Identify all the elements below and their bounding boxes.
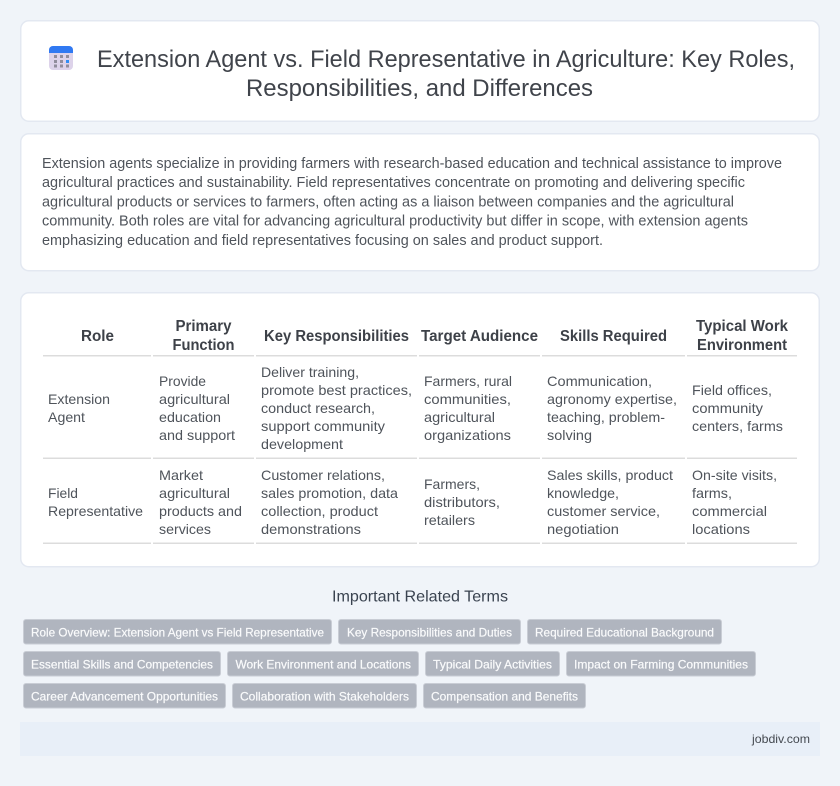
panel: title header: [21, 21, 819, 121]
table row: Extension Agent: conduct research,: [261, 400, 375, 416]
table row: Field Representative: On-site visits,: [692, 467, 777, 483]
table row: Extension Agent: and support: [159, 427, 235, 443]
table row: Extension Agent: solving: [547, 427, 592, 443]
panel: summary text: [21, 134, 819, 271]
table row: Field Representative: Customer relations,: [261, 467, 385, 483]
table row: Extension Agent: [48, 364, 783, 452]
table row: Extension Agent: agricultural: [159, 391, 230, 407]
panel: related term chips: Collaboration with Stakeholders: [240, 689, 409, 703]
table row: Field Representative: farms,: [692, 485, 732, 501]
footer: [20, 722, 820, 756]
table row: Extension Agent: agricultural: [424, 409, 495, 425]
panel: comparison table: [21, 293, 819, 567]
table row: Field Representative: sales promotion, data: [261, 485, 398, 501]
panel: related term chips: [24, 620, 756, 708]
table row: Extension Agent: Provide: [159, 373, 206, 389]
panel: related term chips: Compensation and Benefits: [431, 689, 578, 703]
panel: summary text: community. Both roles are vital for advancing agricultural productivity but differ in scope, with extension agents: [42, 214, 748, 230]
table row: Field Representative: knowledge,: [547, 485, 619, 501]
table header row: Key Responsibilities: [264, 328, 409, 345]
table header row: Primary: [176, 318, 232, 335]
table row: Extension Agent: Farmers, rural: [424, 373, 512, 389]
table row: Extension Agent: Deliver training,: [261, 364, 359, 380]
table row: Extension Agent: education: [159, 409, 221, 425]
table header row: Function: [172, 337, 234, 354]
heading: important related terms: Important Related Terms: [332, 588, 508, 606]
panel: related term chips: Key Responsibilities and Duties: [347, 625, 512, 639]
table row: Field Representative: negotiation: [547, 521, 619, 537]
icon: calendar: [49, 46, 73, 70]
table header row: Typical Work: [696, 318, 788, 335]
table row: Field Representative: collection, product: [261, 503, 378, 519]
table row: Field Representative: services: [159, 521, 211, 537]
table header row: Skills Required: [560, 328, 667, 345]
table row: Extension Agent: community: [692, 400, 763, 416]
table row: Field Representative: Farmers,: [424, 476, 480, 492]
table header row: Role: [81, 328, 114, 345]
table row: Extension Agent: teaching, problem-: [547, 409, 665, 425]
panel: summary text: emphasizing education and field representatives focusing on sales and product support.: [42, 233, 603, 249]
table row: Field Representative: Field: [48, 485, 78, 501]
table row: Extension Agent: agronomy expertise,: [547, 391, 677, 407]
table row: Extension Agent: development: [261, 436, 343, 452]
panel: related term chips: Role Overview: Extension Agent vs Field Representative: [31, 625, 324, 639]
table row: Field Representative: agricultural: [159, 485, 230, 501]
table row: Extension Agent: Field offices,: [692, 382, 772, 398]
footer: jobdiv.com: [751, 732, 810, 746]
table row: Field Representative: Market: [159, 467, 203, 483]
panel: related term chips: Required Educational Background: [535, 625, 714, 639]
title: [97, 47, 795, 102]
table row: Field Representative: products and: [159, 503, 242, 519]
table row: Extension Agent: Extension: [48, 391, 110, 407]
table row: Extension Agent: communities,: [424, 391, 511, 407]
table row: Extension Agent: organizations: [424, 427, 511, 443]
panel: related term chips: Typical Daily Activities: [433, 657, 552, 671]
table row: Extension Agent: promote best practices,: [261, 382, 412, 398]
table header row: Target Audience: [421, 328, 538, 345]
table row: Extension Agent: Agent: [48, 409, 85, 425]
panel: related term chips: Essential Skills and Competencies: [31, 657, 213, 671]
panel: related term chips: Impact on Farming Communities: [574, 657, 748, 671]
table row: Field Representative: locations: [692, 521, 750, 537]
panel: related term chips: Work Environment and Locations: [236, 657, 411, 671]
table header row: Environment: [697, 337, 788, 354]
panel: summary text: agricultural products or services to farmers, often acting as a liaison between companies and the agricultural: [42, 194, 734, 210]
panel: summary text: agricultural practices and sustainability. Field representatives concentrate on promoting and delivering specific: [42, 175, 745, 191]
title: Responsibilities, and Differences: [246, 76, 593, 102]
table row: Field Representative: commercial: [692, 503, 767, 519]
table row: Field Representative: Representative: [48, 503, 143, 519]
table row: Field Representative: distributors,: [424, 494, 500, 510]
table header row: [81, 318, 788, 354]
table row: Extension Agent: support community: [261, 418, 385, 434]
panel: related term chips: Career Advancement Opportunities: [31, 689, 218, 703]
panel: summary text: Extension agents specialize in providing farmers with research-based education and technical assistance to improve: [42, 156, 782, 172]
table row: Field Representative: demonstrations: [261, 521, 361, 537]
table row: Extension Agent: centers, farms: [692, 418, 783, 434]
table row: Field Representative: Sales skills, product: [547, 467, 673, 483]
title: Extension Agent vs. Field Representative in Agriculture: Key Roles,: [97, 47, 795, 73]
table row: Field Representative: [48, 467, 777, 537]
table row: Extension Agent: Communication,: [547, 373, 652, 389]
table row: Field Representative: customer service,: [547, 503, 660, 519]
table row: Field Representative: retailers: [424, 512, 475, 528]
